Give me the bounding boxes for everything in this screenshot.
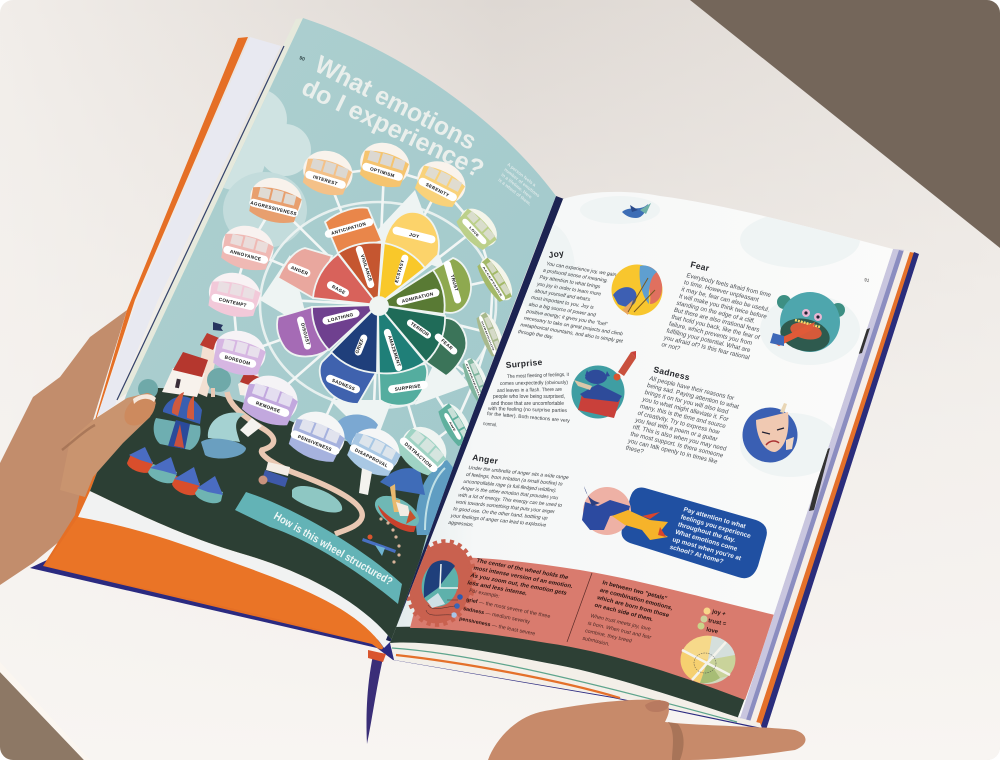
fear section: failure, which prevents you from <box>668 321 753 347</box>
four small tents <box>127 447 223 503</box>
Serenity: SERENITY <box>425 182 450 198</box>
page number: 90 <box>298 55 306 63</box>
joy section <box>517 248 646 352</box>
Boredom: BOREDOM <box>224 354 251 366</box>
teal trees <box>138 368 231 399</box>
petal labels: ECSTASY <box>394 259 405 283</box>
surprise section: Surprise <box>505 357 543 370</box>
joy section: positive energy; it gives you the "fuel" <box>525 309 609 328</box>
title: What emotions <box>310 50 481 156</box>
anger section: uncontrollable rage (a full-fledged wildfire). <box>462 479 558 494</box>
striped dome tent <box>154 392 202 450</box>
petal labels <box>286 217 462 394</box>
Disapproval stand <box>359 468 372 495</box>
joy section: through the day. <box>517 329 554 341</box>
gutter shadow <box>386 196 564 642</box>
petal labels: TERROR <box>410 321 430 338</box>
petal labels: JOY <box>409 232 420 239</box>
Interest: INTEREST <box>312 174 338 186</box>
sadness section: riff. This is also when you may need <box>632 424 728 453</box>
anger section: to good use. On the other hand, bottling up <box>452 506 549 522</box>
Remorse: REMORSE <box>255 400 281 414</box>
callout bubble: school? At home? <box>669 544 724 565</box>
wheel center explanation: grief — the most severe of the three <box>466 597 551 620</box>
joy section: Joy <box>548 248 565 260</box>
wheel center explanation: sadness — medium severity <box>463 606 531 626</box>
sadness section: these? <box>625 444 645 456</box>
combination emotions explanation: submission. <box>581 636 611 648</box>
Love: LOVE <box>468 226 480 238</box>
sadness section: many, this is the time and source <box>639 403 727 430</box>
joy section: you joy in order to learn more <box>536 281 602 298</box>
mini wheel diagram <box>680 636 735 684</box>
gear and zoom circle <box>400 535 482 631</box>
combination emotions explanation: are combination emotions, <box>599 588 674 612</box>
intro text: number of emotions <box>503 167 541 199</box>
joy section: most important to you. Joy is <box>530 295 595 311</box>
Disapproval <box>347 428 401 476</box>
right page <box>380 180 900 730</box>
sadness section: you to what might alleviate it. For <box>641 396 729 423</box>
joy section: a profound sense of meaning. <box>542 268 609 284</box>
fear section: standing on the edge of a cliff. <box>675 300 756 325</box>
anger section: aggression. <box>447 520 475 528</box>
surprise section: and those that are uncomfortable <box>491 401 564 407</box>
icon: bear monster <box>770 292 845 356</box>
Love <box>456 208 497 250</box>
fairground path <box>227 392 362 534</box>
houses <box>162 322 262 398</box>
sadness section: you feel with a poem or a guitar <box>634 417 718 443</box>
Annoyance <box>217 220 278 275</box>
fear section: it may be, fear can also be useful. <box>680 286 771 314</box>
intro text <box>498 163 540 206</box>
combination emotions explanation: When trust meets joy, love <box>589 613 651 633</box>
petal labels: ADMIRATION <box>401 291 434 304</box>
Pensiveness: PENSIVENESS <box>297 434 333 452</box>
right hand under book <box>488 700 806 760</box>
callout bubble <box>622 487 767 578</box>
left thumb over page <box>60 393 156 497</box>
fear section: or not? <box>660 341 682 352</box>
surprise section: comes unexpectedly (obviously) <box>500 380 568 387</box>
petal labels: SURPRISE <box>394 383 421 392</box>
Contempt: CONTEMPT <box>218 297 247 308</box>
Remorse stand <box>240 418 262 437</box>
Submission: SUBMISSION <box>481 321 495 351</box>
petal labels: ANGER <box>290 265 309 276</box>
combination emotions explanation: In between two "petals" <box>601 580 668 602</box>
Apprehension: APPREHENSION <box>465 363 482 401</box>
salmon panel <box>410 557 775 700</box>
wheel center explanation: most intense version of an emotion. <box>472 566 574 590</box>
wheel center explanation: As you zoom out, the emotion gets <box>469 573 568 597</box>
fear section: Fear <box>690 259 711 273</box>
joy section: also a big source of power and <box>528 302 597 318</box>
sadness section: brings it on for you will also lead <box>644 389 730 416</box>
gondolas <box>204 137 518 495</box>
sadness section: being sad. Paying attention to what <box>646 382 740 411</box>
joy section: metaphorical mountains, and also to simply get <box>519 322 624 345</box>
petal labels: TRUST <box>450 274 459 292</box>
snack cart <box>258 462 290 487</box>
pale clouds <box>515 196 860 477</box>
icon: jack in the box and rocket <box>572 351 636 418</box>
Pensiveness <box>288 412 345 462</box>
Apprehension <box>462 358 486 402</box>
combination emotions explanation: on each side of them. <box>593 603 654 623</box>
anger section <box>447 452 573 536</box>
fear section: It will make you think twice before <box>678 293 768 321</box>
joy plus trust equals love <box>698 608 727 636</box>
panel divider <box>567 573 592 642</box>
callout bubble: up most when you're at <box>671 536 743 562</box>
seesaw and dots <box>362 517 401 564</box>
fear section: Everybody feels afraid from time <box>685 272 773 299</box>
sadness section: All people have their reasons for <box>648 375 735 402</box>
blue dome and carousel <box>335 414 455 535</box>
fear section: to time. However unpleasant <box>683 279 760 304</box>
petal labels: RAGE <box>331 284 346 295</box>
inner wedges <box>380 242 425 298</box>
fear section <box>660 259 776 369</box>
ribbon: how is this wheel structured: How is this wheel structured? <box>272 510 395 588</box>
fear section: that hold you back, like the fear of <box>670 314 761 341</box>
anger section: with a lot of energy. This energy can be used to <box>457 493 563 509</box>
joy section: about yourself and what's <box>534 288 592 303</box>
callout bubble: throughout the day. <box>677 521 737 544</box>
combination emotions explanation: combine, they breed <box>584 628 633 644</box>
sadness section: the most support. Is there someone <box>629 431 725 460</box>
page number right: 91 <box>864 277 870 283</box>
ground <box>90 388 430 640</box>
wave and bush trees <box>201 412 342 513</box>
Disapproval: DISAPPROVAL <box>354 447 389 468</box>
anger section: work towards something that puts your anger <box>455 499 556 515</box>
icon: sad mask <box>742 403 798 462</box>
wheel center explanation: The center of the wheel holds the <box>475 558 570 581</box>
callout bubble: feelings you experience <box>680 514 752 540</box>
intro text: in a lifetime. Here <box>500 172 533 200</box>
petal labels: AMAZEMENT <box>387 335 402 367</box>
petal labels: DISGUST <box>300 322 311 346</box>
Interest <box>302 150 352 196</box>
petal labels: GRIEF <box>354 338 365 354</box>
fear section: you afraid of? Is this fear rational <box>663 334 750 361</box>
sadness section <box>625 364 744 474</box>
intro text: A person feels a <box>506 162 537 188</box>
emotion wheel <box>277 208 471 406</box>
Aggressiveness <box>245 172 306 228</box>
Contempt <box>204 268 265 321</box>
anger section: your feelings of anger can lead to explosive <box>450 513 547 529</box>
surprise section: and leaves in a flash. There are <box>497 387 562 394</box>
sadness section: of creativity. Try to express how <box>636 410 721 436</box>
fear section: fulfilling your potential. What are <box>665 327 752 354</box>
icon: dragon breathing fire <box>582 486 668 540</box>
outer petals <box>384 212 439 268</box>
Serenity <box>415 161 466 207</box>
sadness section: Sadness <box>653 364 691 382</box>
fear section: But there are also irrational fears <box>673 307 760 334</box>
anger section: Under the umbrella of anger sits a wide range <box>467 465 570 481</box>
joy plus trust equals love: trust = <box>708 618 727 628</box>
Acceptance <box>477 258 512 302</box>
wheel center explanation: pensiveness — the least severe <box>459 616 536 637</box>
petal labels: VIGILANCE <box>360 254 373 282</box>
bookmark ribbon <box>367 650 386 744</box>
wheel center explanation <box>426 558 577 637</box>
combination emotions explanation: is born. When trust and fear <box>587 621 652 641</box>
petal labels: LOATHING <box>327 312 354 323</box>
wheel center explanation: For example: <box>469 588 500 600</box>
callout bubble: Pay attention to what <box>682 506 747 530</box>
anger section: Anger <box>472 452 499 466</box>
joy plus trust equals love: joy + <box>711 609 727 618</box>
joy section: Pay attention to what brings <box>538 275 601 290</box>
surprise section <box>483 357 571 428</box>
Boredom <box>209 325 270 380</box>
wheel spokes and rim <box>233 168 496 455</box>
surprise section: people who love being surprised, <box>493 394 565 400</box>
anger section: of feelings, from irritation (a small bonfire) to <box>465 472 564 488</box>
joy section: You can experience joy, we gain <box>545 261 617 278</box>
Acceptance: ACCEPTANCE <box>482 266 503 298</box>
clouds <box>223 91 311 247</box>
icon: balloons and ice cream <box>612 264 662 316</box>
Distraction <box>398 426 446 476</box>
petal labels: FEAR <box>440 338 454 351</box>
sadness section: you can talk openly to in times like <box>627 438 719 466</box>
surprise section: normal. <box>483 421 497 428</box>
dark green band <box>385 627 745 725</box>
anger section: Anger is the other emotion that provides you <box>460 486 559 501</box>
Awe: AWE <box>448 421 456 432</box>
Optimism: OPTIMISM <box>369 166 395 178</box>
ribbon: how is this wheel structured <box>235 492 402 604</box>
Remorse <box>237 368 304 431</box>
Optimism <box>360 142 410 188</box>
left page <box>80 10 570 650</box>
joy section: necessary to take on great projects and climb <box>523 316 624 337</box>
white wedges behind petals <box>260 190 470 445</box>
joy plus trust equals love: love <box>706 627 719 636</box>
intro text: is a wheel of them. <box>497 177 532 207</box>
Submission <box>476 312 502 356</box>
surprise section: with the feeling (no surprise parties <box>488 406 568 414</box>
combination emotions explanation: which are born from those <box>595 595 670 619</box>
Awe <box>438 404 469 446</box>
petal labels: SADNESS <box>331 378 356 392</box>
Distraction: DISTRACTION <box>404 441 433 469</box>
Annoyance: ANNOYANCE <box>229 249 262 262</box>
petal labels: ANTICIPATION <box>331 221 367 236</box>
surprise section: The most fleeting of feelings, it <box>507 372 570 380</box>
combination emotions explanation <box>581 580 676 656</box>
left hand behind book <box>0 310 127 585</box>
surprise section: for the latter). Both reactions are very <box>487 411 571 424</box>
Aggressiveness: AGGRESSIVENESS <box>250 200 297 217</box>
title: do I experience? <box>297 73 488 184</box>
bird <box>622 203 651 218</box>
wheel center explanation: less and less intense. <box>466 580 528 597</box>
callout bubble: What emotions come <box>674 529 739 553</box>
